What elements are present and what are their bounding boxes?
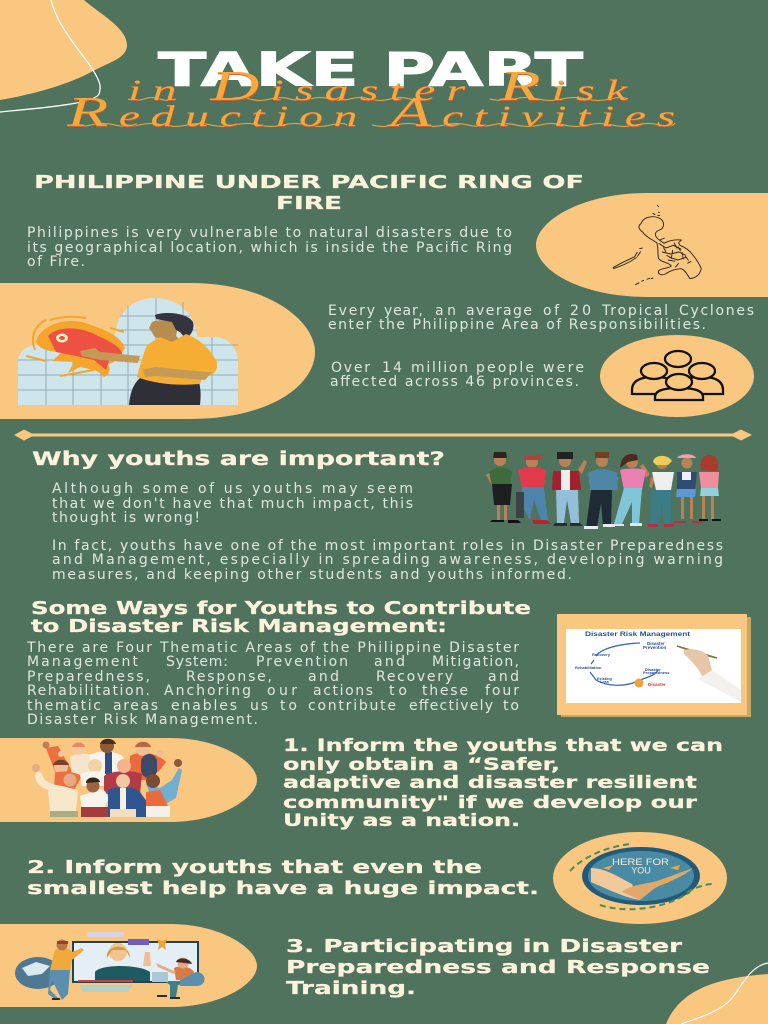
text: vulnerability paragraph: of Fire.: [27, 254, 85, 270]
text: tropical cyclones stat: year,: [384, 303, 423, 319]
image: disaster risk management diagram: Preparedness: [643, 670, 670, 675]
text: thematic areas paragraph: and: [488, 669, 519, 685]
text: step 3: 3. Participating in Disaster: [286, 937, 683, 957]
title: R eduction A ctivities: [66, 90, 676, 137]
text: thematic areas paragraph: Disaster Risk Management.: [27, 712, 258, 728]
text: step 3: Preparedness and Response: [286, 958, 710, 978]
text: thematic areas paragraph: Rehabilitation.: [27, 683, 150, 699]
text: thematic areas paragraph: four: [485, 683, 519, 699]
text: step 3: [286, 937, 710, 999]
image: disaster risk management diagram: Recovery: [592, 652, 611, 657]
image: disaster risk management diagram: Disaster: [648, 682, 666, 687]
text: step 2: [27, 858, 539, 899]
text: tropical cyclones stat: average: [466, 303, 532, 319]
text: tropical cyclones stat: [328, 303, 754, 333]
panel: map blob: [536, 193, 768, 297]
text: affected people stat: million: [411, 360, 468, 376]
heading: some ways to contribute: to Disaster Risk Management:: [31, 617, 447, 637]
title: [66, 42, 676, 137]
text: affected people stat: people: [476, 360, 534, 376]
icon: online training scene: [15, 932, 205, 1000]
icon: here for you badge: HERE FOR: [612, 857, 669, 868]
text: tropical cyclones stat: Every: [328, 303, 375, 319]
icon: man in yellow shirt: [80, 313, 217, 405]
title: R eduction A ctivities: [66, 89, 675, 136]
heading: Philippine under Pacific Ring of Fire: FIRE: [276, 194, 342, 214]
text: step 1: adaptive and disaster resilient: [283, 773, 697, 793]
text: tropical cyclones stat: Cyclones: [679, 303, 754, 319]
text: thematic areas paragraph: Recovery: [376, 669, 453, 685]
text: youths paragraph: Although some of us youths may seem: [52, 481, 413, 497]
title: in D isaster R isk: [128, 63, 629, 110]
text: step 2: 2. Inform youths that even the: [27, 858, 482, 878]
text: thematic areas paragraph: to: [503, 698, 519, 714]
text: thematic areas paragraph: Management: [27, 654, 138, 670]
text: step 2: smallest help have a huge impact.: [27, 879, 539, 899]
image: disaster risk management diagram: Disaster: [645, 667, 661, 672]
text: thematic areas paragraph: enables: [171, 698, 237, 714]
text: thematic areas paragraph: these: [422, 683, 468, 699]
icon: grid backdrop: [18, 298, 238, 405]
text: thematic areas paragraph: us: [250, 698, 268, 714]
text: thematic areas paragraph: Response,: [186, 669, 272, 685]
person 7: [674, 454, 702, 523]
top-left decorative blob: [0, 0, 127, 112]
text: tropical cyclones stat: 20: [570, 303, 591, 319]
text: thematic areas paragraph: effectively: [409, 698, 493, 714]
heading: Philippine under Pacific Ring of Fire: PHILIPPINE UNDER PACIFIC RING OF: [34, 173, 584, 193]
image: disaster risk management diagram: [557, 614, 751, 717]
text: thematic areas paragraph: to: [280, 698, 297, 714]
person 4: [584, 452, 618, 529]
title: in D isaster R isk: [128, 64, 629, 111]
image: disaster risk management diagram: Disaster: [647, 641, 665, 646]
text: affected people stat: were: [543, 360, 584, 376]
text: thematic areas paragraph: System:: [166, 654, 228, 670]
text: affected people stat: 14: [382, 360, 402, 376]
title: TAKE PART: [158, 42, 584, 96]
heading: why youths are important: Why youths are important?: [32, 449, 445, 470]
text: thematic areas paragraph: Preparedness,: [27, 669, 150, 685]
text: thematic areas paragraph: [26, 640, 519, 728]
text: vulnerability paragraph: its geographical location, which is inside the Pacific Ring: [27, 240, 512, 256]
text: tropical cyclones stat: Tropical: [601, 303, 668, 319]
text: thematic areas paragraph: and: [374, 654, 405, 670]
icon: people group in circle: [600, 335, 754, 417]
person 5: [612, 454, 646, 526]
text: tropical cyclones stat: enter the Philippine Area of Responsibilities.: [328, 317, 706, 333]
text: step 1: 1. Inform the youths that we can: [283, 736, 723, 756]
text: thematic areas paragraph: Anchoring: [164, 683, 251, 699]
text: affected people stat: Over: [331, 360, 370, 376]
person 3: [552, 452, 583, 526]
text: step 1: Unity as a nation.: [283, 811, 520, 831]
icon: here for you badge: [553, 832, 727, 924]
text: step 1: [283, 736, 723, 831]
image: disaster risk management diagram: Loss: [600, 680, 609, 684]
text: tropical cyclones stat: of: [543, 303, 560, 319]
text: youths paragraph: that we don't have that much impact, this: [52, 496, 413, 512]
text: affected people stat: [330, 360, 584, 390]
text: thematic areas paragraph: areas: [113, 698, 158, 714]
text: thematic areas paragraph: actions: [313, 683, 373, 699]
text: youths paragraph: [52, 481, 723, 583]
heading: some ways to contribute: [31, 599, 531, 637]
panel: cyclone illustration blob: [0, 283, 315, 419]
icon: Philippines map: [613, 205, 701, 285]
image: disaster risk management diagram: Prevention: [643, 645, 667, 650]
divider: [14, 430, 752, 440]
text: step 1: only obtain a “Safer,: [283, 755, 560, 775]
bottom-right decorative blob: [666, 963, 768, 1024]
text: step 1: community" if we develop our: [283, 793, 698, 813]
text: youths paragraph: thought is wrong!: [52, 510, 200, 526]
icon: here for you badge: YOU: [631, 866, 651, 876]
icon: cyclone: [26, 317, 125, 377]
icon: group of youths: [486, 452, 721, 529]
person 1: [489, 452, 521, 523]
image: disaster risk management diagram: Rehabilitation: [575, 665, 602, 670]
text: youths paragraph: measures, and keeping other students and youths informed.: [52, 567, 572, 583]
text: thematic areas paragraph: and: [308, 669, 339, 685]
text: thematic areas paragraph: There are Four Thematic Areas of the Philippine Disaster: [26, 640, 519, 656]
text: thematic areas paragraph: to: [389, 683, 407, 699]
text: thematic areas paragraph: Prevention: [256, 654, 348, 670]
icon: crowd of people: [32, 739, 182, 817]
person 6: [648, 456, 674, 527]
image: disaster risk management diagram: Existing: [597, 677, 612, 681]
text: thematic areas paragraph: contribute: [308, 698, 396, 714]
image: disaster risk management diagram: Disaster Risk Management: [585, 632, 690, 638]
text: thematic areas paragraph: Mitigation,: [432, 654, 519, 670]
text: thematic areas paragraph: thematic: [27, 698, 101, 714]
text: thematic areas paragraph: our: [267, 683, 297, 699]
text: youths paragraph: and Management, especially in spreading awareness, developing warning: [52, 552, 723, 568]
person 8: [699, 455, 721, 521]
text: vulnerability paragraph: Philippines is very vulnerable to natural disasters due to: [27, 225, 512, 241]
text: tropical cyclones stat: an: [435, 303, 456, 319]
heading: some ways to contribute: Some Ways for Youths to Contribute: [31, 599, 531, 619]
text: step 3: Training.: [286, 979, 416, 999]
panel: training blob: [0, 924, 257, 1007]
person 2: [516, 455, 552, 524]
text: youths paragraph: In fact, youths have one of the most important roles in Disaster Preparedness: [52, 538, 723, 554]
text: vulnerability paragraph: [27, 225, 512, 270]
text: affected people stat: affected across 46 provinces.: [330, 374, 579, 390]
panel: crowd blob: [0, 738, 257, 822]
heading: Philippine under Pacific Ring of Fire: [34, 173, 584, 214]
